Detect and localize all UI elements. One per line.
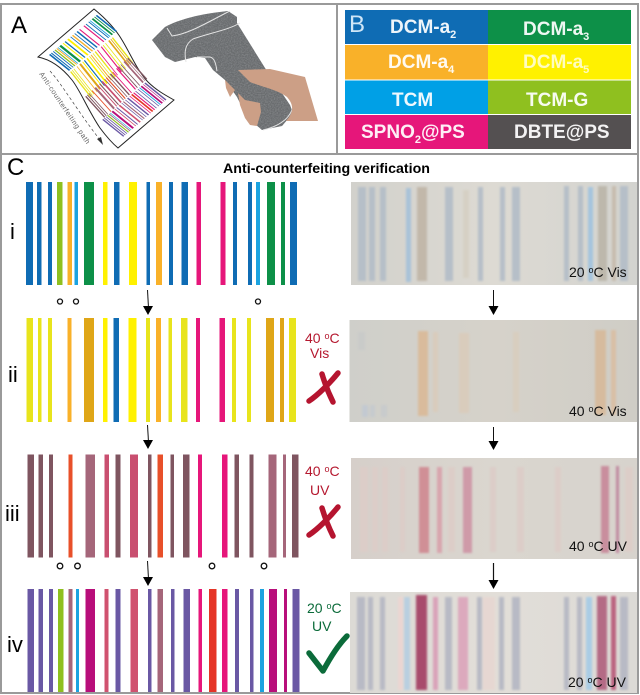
legend swatches xyxy=(345,10,631,149)
legend labels: 2 xyxy=(450,29,456,41)
dashed path arrow xyxy=(50,71,103,145)
arrow photo iii to iv xyxy=(488,563,498,589)
barcode row i xyxy=(26,182,297,285)
row label iii: iii xyxy=(5,501,20,526)
legend labels: 5 xyxy=(583,64,589,76)
legend labels: TCM xyxy=(392,90,433,111)
heading: Anti-counterfeiting verification xyxy=(223,161,430,176)
photo ii: 40 C visible light xyxy=(350,320,637,422)
photo ii: 40 C visible light: 40 xyxy=(569,403,585,419)
condition label 20 C UV: o xyxy=(326,601,331,611)
legend labels: DCM-a xyxy=(523,19,583,40)
panel letter C: C xyxy=(7,154,24,181)
condition label 40 C Vis: o xyxy=(324,331,329,341)
photo i: 20 C visible light: 20 xyxy=(569,264,585,280)
anti-counterfeiting label sheet xyxy=(38,9,174,148)
icon: hand xyxy=(225,69,318,126)
photo i: 20 C visible light: o xyxy=(588,265,593,275)
row label ii: ii xyxy=(8,362,18,387)
legend labels: DBTE@PS xyxy=(514,122,610,143)
condition label 20 C UV: 20 xyxy=(307,600,323,616)
panel B: colour legend xyxy=(345,10,631,149)
photo i: 20 C visible light: C Vis xyxy=(593,264,627,280)
photo iv: 20 C UV: 20 xyxy=(568,674,584,690)
panel A: scanning illustration xyxy=(11,9,318,148)
condition label 40 C Vis: Vis xyxy=(310,345,329,361)
row label iv: iv xyxy=(7,632,23,657)
legend labels: 3 xyxy=(583,31,589,43)
legend labels: @PS xyxy=(421,122,465,143)
photo iii: 40 C UV: C UV xyxy=(593,538,628,554)
condition label 40 C UV: 40 xyxy=(305,463,321,479)
condition label 40 C Vis xyxy=(305,330,340,361)
photo iv: 20 C UV: C UV xyxy=(592,674,627,690)
photo i: 20 C visible light xyxy=(351,182,637,285)
icon: red cross iii xyxy=(309,507,338,536)
condition label 20 C UV xyxy=(307,600,342,634)
panel letter A: A xyxy=(11,12,27,39)
photo ii: 40 C visible light: C Vis xyxy=(593,403,627,419)
photo iii: 40 C UV: o xyxy=(588,539,593,549)
condition label 40 C UV xyxy=(305,463,340,498)
legend labels: DCM-a xyxy=(523,52,583,73)
icon: red cross ii xyxy=(309,373,338,402)
arrow photo i to ii xyxy=(488,290,498,315)
scan markers row i xyxy=(58,299,260,304)
condition label 40 C UV: UV xyxy=(310,482,330,498)
legend labels: DCM-a xyxy=(388,52,448,73)
condition label 20 C UV: C xyxy=(331,600,342,616)
panel letter B: B xyxy=(349,11,365,38)
arrow photo ii to iii xyxy=(488,427,498,450)
photo iv: 20 C UV: o xyxy=(587,675,592,685)
condition label 20 C UV: UV xyxy=(312,618,332,634)
legend labels xyxy=(361,17,610,146)
anti-counterfeiting path text: Anti-counterfeiting path xyxy=(37,70,92,146)
legend labels: SPNO xyxy=(361,122,415,143)
legend labels: 2 xyxy=(415,134,421,146)
barcode row ii xyxy=(26,318,296,422)
barcode row iii xyxy=(28,454,298,558)
photo iii: 40 C UV: 40 xyxy=(569,538,585,554)
panel C: verification sequence xyxy=(5,154,637,693)
condition label 40 C Vis: C xyxy=(329,330,340,346)
row label i: i xyxy=(10,219,15,244)
scan markers row iii xyxy=(57,563,267,569)
condition label 40 C UV: C xyxy=(329,463,340,479)
arrow ii to iii xyxy=(143,425,153,449)
icon: green check xyxy=(309,636,347,671)
condition label 40 C UV: o xyxy=(324,464,329,474)
arrow iii to iv xyxy=(143,561,153,586)
photo iv: 20 C UV xyxy=(350,592,637,693)
legend labels: TCM-G xyxy=(526,90,588,111)
legend labels: 4 xyxy=(448,64,455,76)
arrow i to ii xyxy=(143,290,153,315)
condition label 40 C Vis: 40 xyxy=(305,330,321,346)
barcode row iv xyxy=(28,589,300,692)
photo iii: 40 C UV xyxy=(351,458,637,559)
legend labels: DCM-a xyxy=(390,17,450,38)
photo ii: 40 C visible light: o xyxy=(588,404,593,414)
icon: handheld scanner xyxy=(152,11,293,130)
